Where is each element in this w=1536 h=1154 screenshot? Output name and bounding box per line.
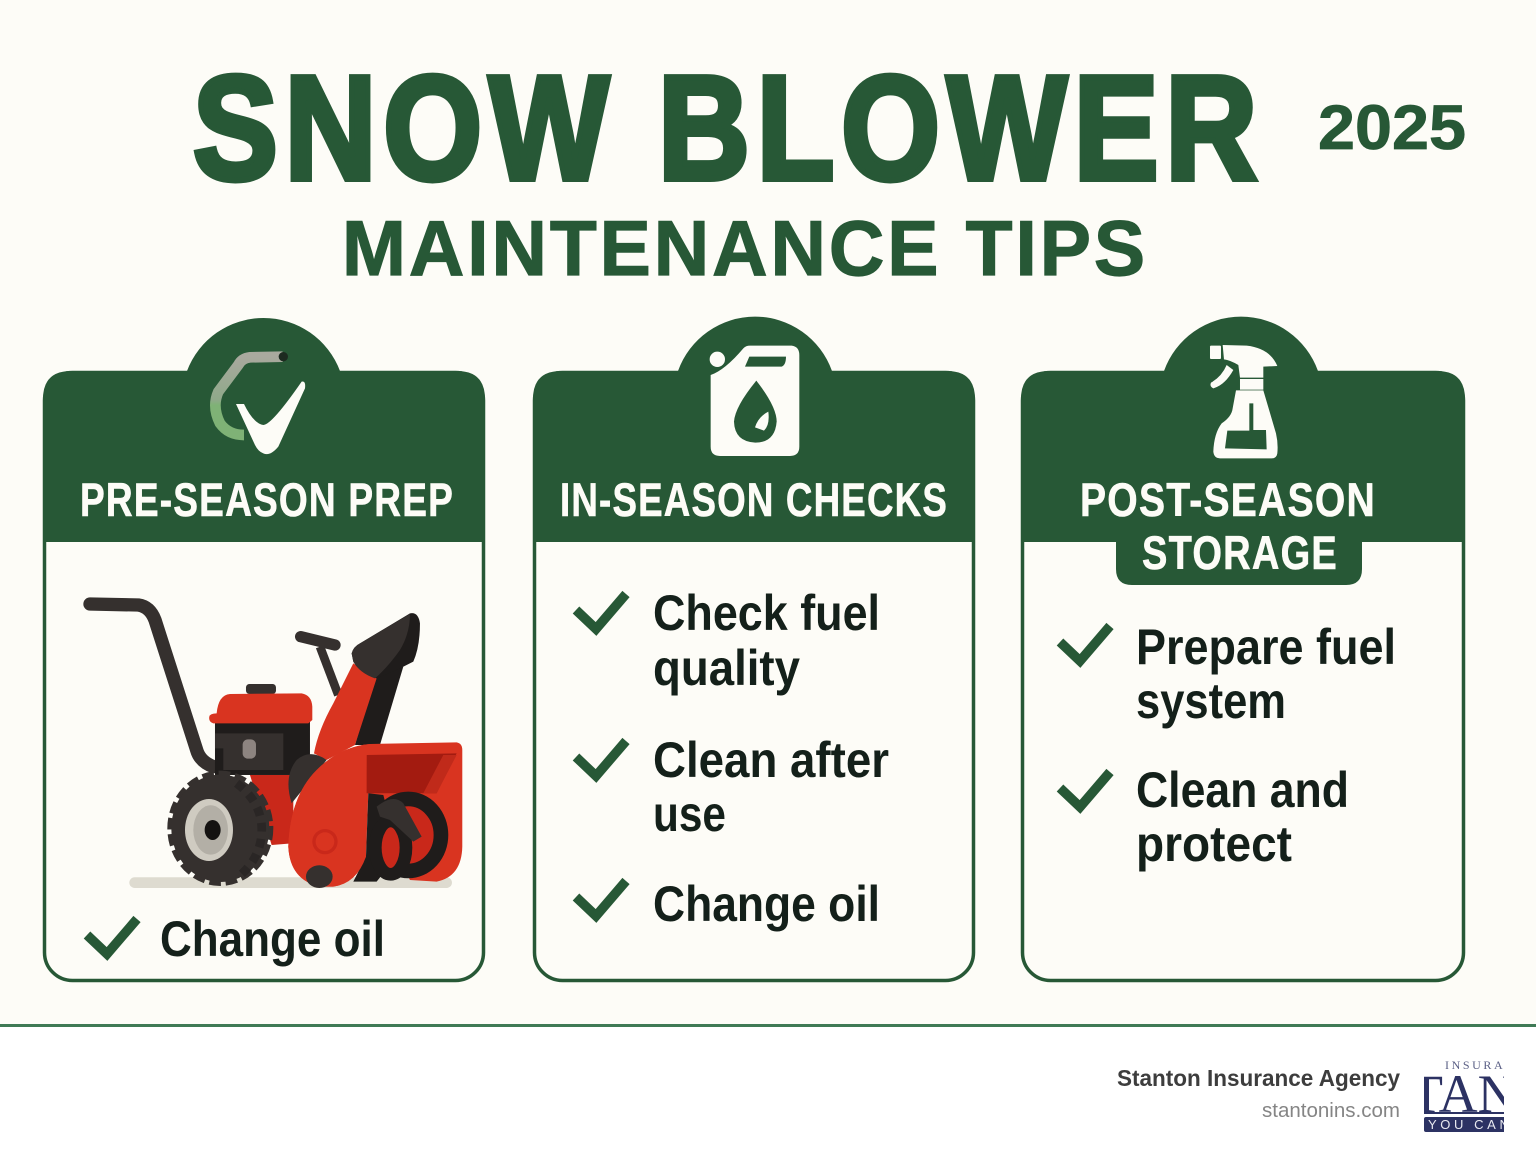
logo: stanton insurance: INSURANCE [1445,1058,1536,1072]
illustration: red snow blower [90,604,462,888]
footer: website: stantonins.com [1262,1100,1400,1122]
year label: 2025 [1318,93,1466,163]
check item: change oil [87,911,385,967]
heading: in-season checks: IN-SEASON CHECKS [560,473,948,526]
check item: prepare fuel system: system [1136,673,1286,729]
footer: agency name: Stanton Insurance Agency [1117,1065,1400,1091]
heading: pre-season prep: PRE-SEASON PREP [80,473,454,526]
check item: change oil: Change oil [653,876,880,932]
check item: check fuel quality: Check fuel [653,585,880,641]
check item: change oil: Change oil [160,911,385,967]
icon: spray bottle [1210,345,1278,458]
heading: post-season storage: POST-SEASON [1080,473,1376,526]
check item: clean and protect [1060,762,1349,872]
check item: prepare fuel system [1060,619,1396,729]
check item: clean and protect: Clean and [1136,762,1349,818]
logo: stanton insurance: YOU CAN [1428,1117,1512,1132]
panel: pre-season prep [43,318,485,980]
check item: clean after use: Clean after [653,732,889,788]
title: snow blower: SNOW BLOWER [193,46,1264,211]
heading: post-season storage: STORAGE [1142,526,1338,579]
panel header: post-season [1021,317,1465,585]
check item: clean after use [576,732,889,842]
panel: post-season storage [1021,317,1465,981]
heading: post-season storage [1080,473,1376,579]
check item: change oil [576,876,880,932]
check item: check fuel quality [576,585,880,696]
subtitle: maintenance tips: MAINTENANCE TIPS [342,204,1148,292]
check item: clean and protect: protect [1136,816,1292,872]
icon: checkmark with arc [215,352,305,454]
logo: stanton insurance: TAN [1410,1064,1517,1124]
icon: oil jerrycan [708,346,799,456]
footer band [0,1024,1536,1154]
panel header: in-season [533,317,975,542]
check item: prepare fuel system: Prepare fuel [1136,619,1396,675]
check item: clean after use: use [653,786,726,842]
panel header: pre-season [43,318,485,542]
panel: in-season checks [533,317,975,981]
check item: check fuel quality: quality [653,640,800,696]
logo: stanton insurance [1424,1062,1504,1132]
